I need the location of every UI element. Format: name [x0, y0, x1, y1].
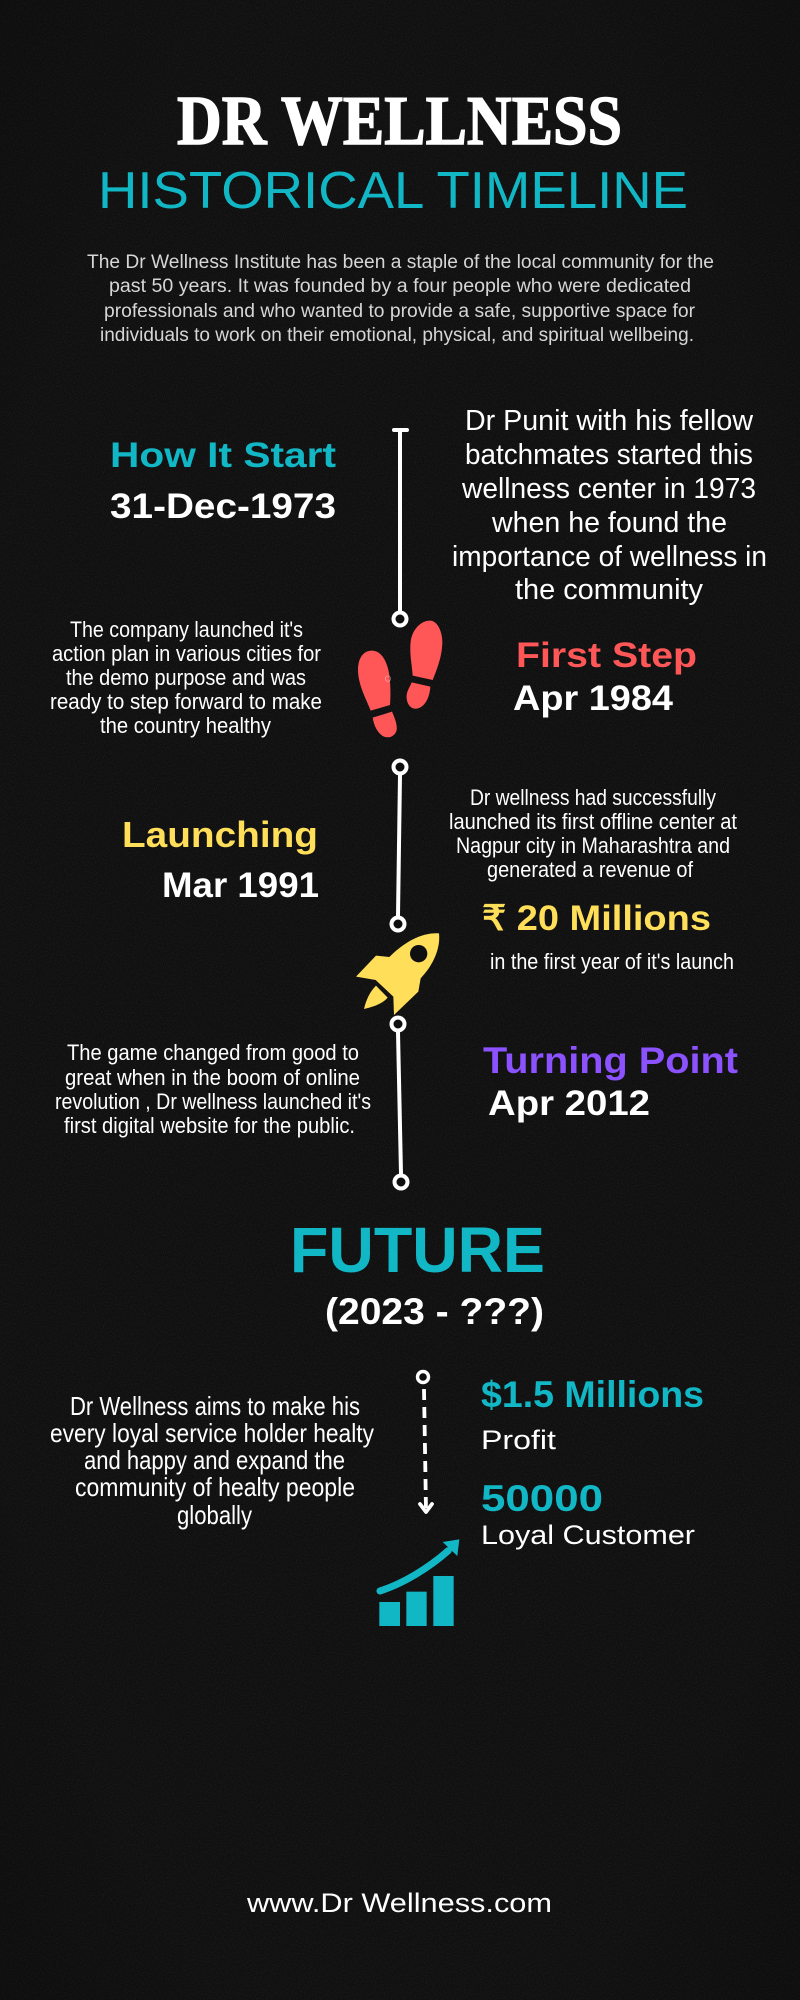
timeline segment 3 [392, 1018, 408, 1188]
stat: loyal customer [481, 1478, 695, 1550]
title: DR WELLNESS [177, 83, 622, 160]
text: first step description: action plan in various cities for [52, 641, 321, 666]
text: revenue note: in the first year of it's launch [490, 949, 734, 974]
subtitle: HISTORICAL TIMELINE [98, 162, 688, 220]
dashed arrow [418, 1372, 432, 1512]
icon: rocket [356, 933, 439, 1015]
icon: growth chart [379, 1539, 459, 1626]
text: how it start description [452, 405, 767, 606]
text: future description: and happy and expand the [84, 1445, 345, 1475]
text: how it start description: batchmates started this [465, 439, 753, 471]
intro paragraph: professionals and who wanted to provide a safe, supportive space for [104, 301, 696, 322]
intro paragraph [87, 252, 714, 346]
text: first step description: The company launched it's [70, 617, 303, 642]
text: turning point description [55, 1040, 371, 1138]
text: launching description: Dr wellness had successfully [470, 785, 717, 810]
heading: how it start: How It Start [110, 436, 336, 475]
heading: launching: Launching [122, 814, 318, 855]
heading: how it start [110, 436, 336, 526]
text: launching description: Nagpur city in Maharashtra and [456, 833, 730, 858]
revenue figure: ₹ 20 Millions [482, 899, 711, 938]
heading: first step: First Step [516, 636, 697, 675]
text: launching description: generated a revenue of [487, 857, 694, 882]
icon: footprints [358, 621, 442, 737]
heading: launching [122, 814, 319, 905]
text: first step description: the demo purpose and was [66, 665, 306, 690]
text: turning point description: great when in the boom of online [65, 1065, 360, 1090]
text: first step description: ready to step forward to make [50, 689, 322, 714]
text: launching description: launched its first offline center at [449, 809, 738, 834]
stat: profit: Profit [481, 1425, 557, 1455]
stat: loyal customer: Loyal Customer [481, 1520, 695, 1550]
text: first step description [50, 617, 322, 738]
heading: launching: Mar 1991 [162, 866, 319, 905]
heading: first step: Apr 1984 [513, 679, 674, 718]
text: how it start description: Dr Punit with his fellow [465, 405, 754, 437]
text: turning point description: revolution , Dr wellness launched it's [55, 1089, 371, 1114]
intro paragraph: The Dr Wellness Institute has been a staple of the local community for the [87, 252, 714, 273]
stat: loyal customer: 50000 [481, 1478, 603, 1519]
stat: profit [481, 1374, 704, 1455]
text: future description [50, 1391, 374, 1530]
text: first step description: the country healthy [100, 713, 272, 738]
text: how it start description: importance of wellness in [452, 541, 767, 573]
text: how it start description: the community [515, 574, 703, 606]
stat: profit: $1.5 Millions [481, 1374, 704, 1415]
text: turning point description: first digital website for the public. [64, 1113, 355, 1138]
text: future description: every loyal service holder healty [50, 1418, 374, 1448]
future date range: (2023 - ???) [325, 1291, 544, 1332]
text: future description: globally [177, 1500, 252, 1530]
text: how it start description: wellness center in 1973 [461, 473, 756, 505]
text: launching description [449, 785, 738, 882]
heading: turning point: Turning Point [483, 1040, 738, 1081]
intro paragraph: past 50 years. It was founded by a four people who were dedicated [109, 276, 691, 297]
timeline segment 1 [394, 430, 407, 626]
heading: turning point: Apr 2012 [488, 1084, 650, 1123]
text: future description: community of healty people [75, 1472, 355, 1502]
heading: first step [513, 636, 697, 718]
heading: future: FUTURE [290, 1214, 545, 1286]
intro paragraph: individuals to work on their emotional, physical, and spiritual wellbeing. [100, 325, 694, 346]
heading: how it start: 31-Dec-1973 [110, 487, 336, 526]
text: future description: Dr Wellness aims to make his [70, 1391, 360, 1421]
timeline segment 2 [392, 760, 406, 930]
text: turning point description: The game changed from good to [67, 1040, 359, 1065]
footer website: www.Dr Wellness.com [246, 1888, 552, 1918]
heading: turning point [483, 1040, 738, 1123]
text: how it start description: when he found the [491, 507, 727, 539]
